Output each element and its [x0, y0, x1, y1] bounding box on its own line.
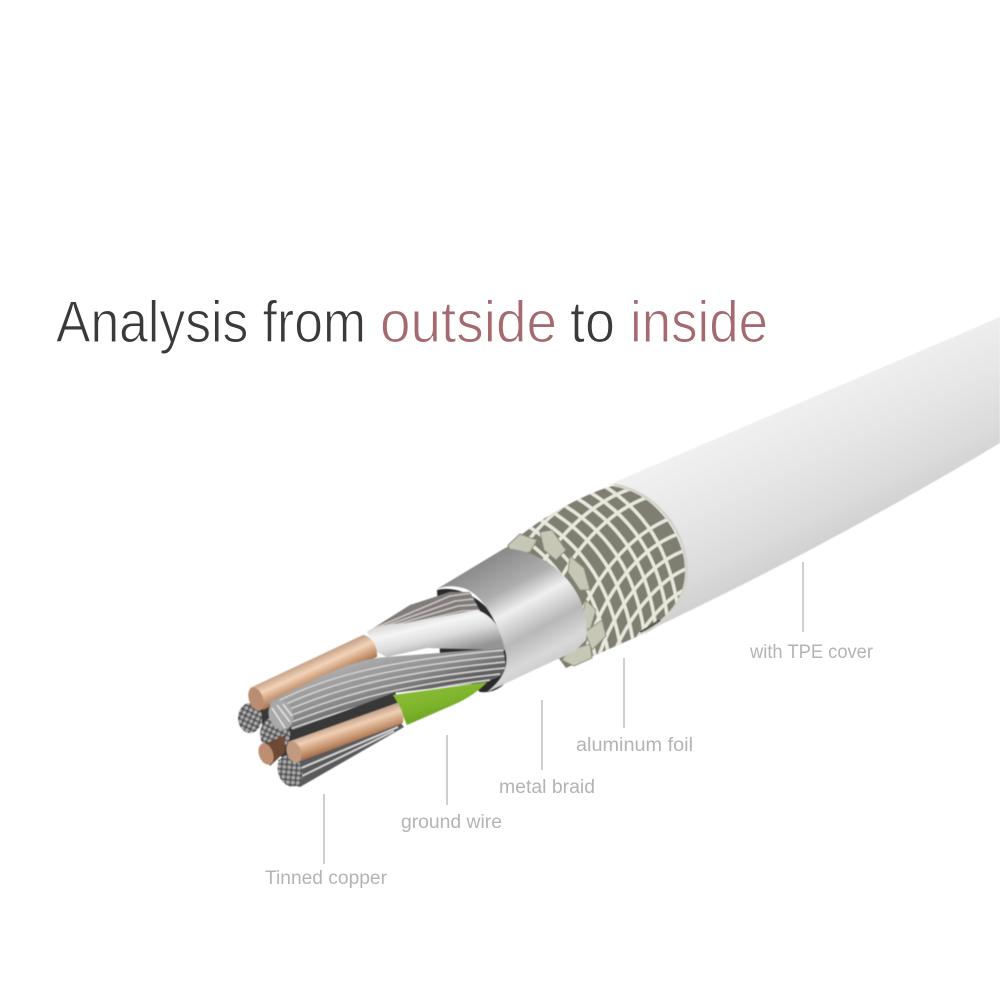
label: with TPE cover: with TPE cover	[749, 642, 874, 663]
title	[56, 290, 768, 355]
back gray strand	[373, 591, 480, 628]
aluminum foil	[437, 548, 587, 692]
label: Tinned copper: Tinned copper	[265, 868, 388, 889]
green ground wire	[393, 682, 487, 725]
center stranded end	[260, 717, 290, 751]
label: aluminum foil	[576, 658, 693, 756]
cable illustration	[238, 317, 1000, 790]
label: Tinned copper	[265, 794, 388, 889]
dark core shadow between strands	[258, 690, 402, 764]
label: metal braid	[499, 700, 595, 798]
white insulated wire	[367, 610, 506, 657]
far-left stranded end	[238, 703, 262, 733]
label: with TPE cover	[749, 562, 874, 663]
lower gray strand	[273, 722, 404, 790]
title: inside	[630, 290, 768, 355]
label: aluminum foil: aluminum foil	[576, 735, 693, 756]
label: ground wire: ground wire	[401, 812, 502, 833]
title: Analysis from	[56, 290, 366, 355]
cavity inside foil	[437, 589, 512, 692]
metal braid	[506, 486, 686, 668]
lower copper conductor	[284, 703, 403, 765]
title: to	[570, 290, 615, 355]
label: metal braid: metal braid	[499, 777, 595, 798]
top copper conductor	[245, 635, 377, 713]
title: outside	[380, 290, 557, 355]
TPE jacket	[608, 317, 1000, 633]
label: ground wire	[401, 735, 502, 833]
large gray strand	[265, 648, 507, 733]
small copper wire end	[256, 735, 285, 767]
